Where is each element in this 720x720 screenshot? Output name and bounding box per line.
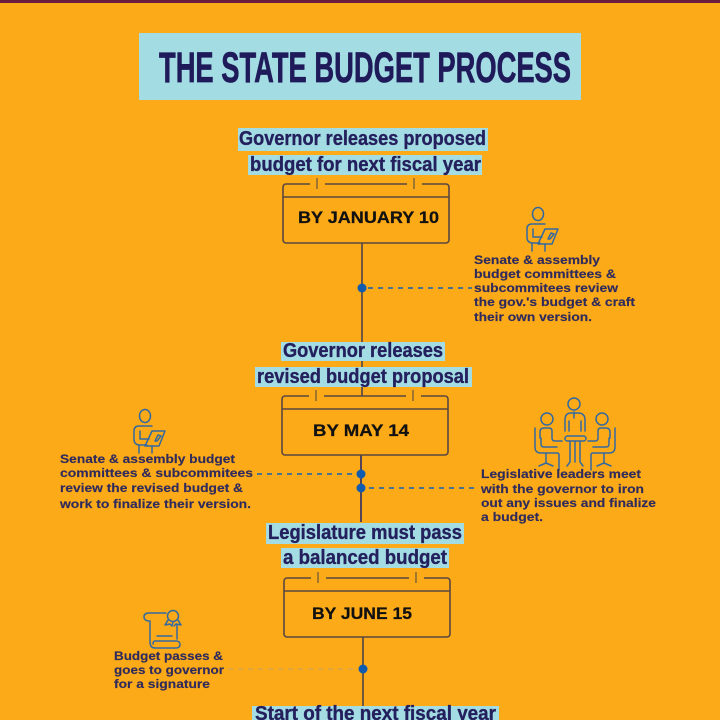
text: leaders meet: Legislative leaders meet xyxy=(481,467,641,481)
step 3 date box: BY JUNE 15 xyxy=(312,605,412,623)
text: committees finalize: work to finalize their version. xyxy=(59,497,251,511)
text: budget passes xyxy=(114,649,224,691)
step 1 heading: Governor releases proposed xyxy=(239,127,486,150)
connector: budget passes xyxy=(228,664,368,674)
text: leaders meet xyxy=(480,467,656,524)
step 2 date box: BY MAY 14 xyxy=(313,422,410,440)
text: budget passes: for a signature xyxy=(114,677,210,691)
connector: leaders meet xyxy=(356,484,478,492)
text: committees review budget: subcommitees review xyxy=(474,281,619,295)
text: committees finalize: Senate & assembly budget xyxy=(60,452,235,466)
text: leaders meet: a budget. xyxy=(481,510,543,524)
icon: signed scroll xyxy=(144,610,181,648)
step 2 heading: Governor releases xyxy=(283,339,443,362)
text: committees review budget: budget committees & xyxy=(474,267,616,281)
title xyxy=(139,33,581,100)
timeline spine xyxy=(361,243,363,706)
text: budget passes: Budget passes & xyxy=(114,649,223,663)
text: committees finalize: committees & subcommitees xyxy=(60,466,253,480)
step 2 heading xyxy=(255,339,472,388)
step 3 heading: Legislature must pass xyxy=(268,521,462,544)
top bar xyxy=(0,0,720,3)
step 3 heading xyxy=(266,521,464,569)
step 3 date box xyxy=(284,572,450,637)
text: committees finalize: review the revised budget & xyxy=(60,481,243,495)
icon: leaders at table xyxy=(535,398,615,470)
step 1 heading: budget for next fiscal year xyxy=(250,153,481,176)
text: committees review budget: the gov.'s budget & craft xyxy=(474,295,635,309)
text: committees review budget xyxy=(474,253,635,324)
text: committees review budget: Senate & assembly xyxy=(474,253,600,267)
step 1 heading xyxy=(238,127,488,176)
text: leaders meet: with the governor to iron xyxy=(480,482,644,496)
connector: committees finalize xyxy=(257,470,366,478)
text: committees finalize xyxy=(59,452,253,511)
icon: person with clipboard xyxy=(527,208,558,251)
text: leaders meet: out any issues and finalize xyxy=(481,496,656,510)
step 1 date box: BY JANUARY 10 xyxy=(298,209,439,227)
text: budget passes: goes to governor xyxy=(114,663,224,677)
connector: committees review xyxy=(358,284,472,292)
step 3 heading: a balanced budget xyxy=(283,546,447,569)
icon: person with clipboard, left xyxy=(134,410,165,453)
step 2 heading: revised budget proposal xyxy=(257,365,469,388)
step 1 date box xyxy=(283,178,449,243)
text: committees review budget: their own version. xyxy=(474,310,592,324)
step 2 date box xyxy=(282,390,448,455)
